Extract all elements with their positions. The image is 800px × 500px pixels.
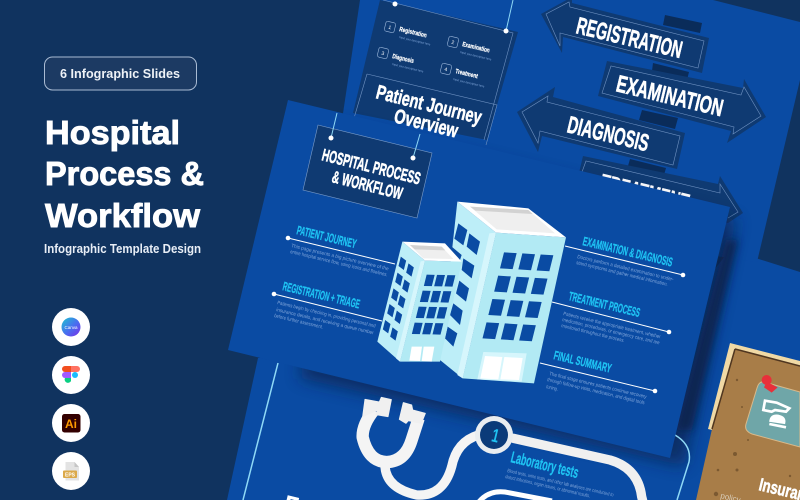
panel: main slide (228, 100, 730, 458)
shadow under main slide (300, 125, 736, 466)
teal note card (746, 375, 800, 447)
illustration: hospital buildings (377, 202, 566, 383)
callout: patient journey: entire hospital service flow, using icons and flowlines. (290, 249, 388, 278)
slide outline (243, 363, 689, 500)
badge: 6 infographic slides: 6 Infographic Slides (60, 66, 180, 81)
callout: final summary: through follow-up visits, medication, and digital tools (547, 377, 646, 406)
callout: examination and diagnosis: EXAMINATION & DIAGNOSIS (581, 234, 674, 269)
icon: figma (52, 356, 90, 394)
icon: adobe illustrator (52, 404, 90, 442)
arrow: treatment: TREATMENT (598, 170, 692, 217)
icon: canva (52, 308, 90, 346)
step 1: Input your description here (399, 35, 431, 47)
step 2: Examination (462, 41, 490, 54)
arrow: examination (598, 61, 766, 143)
arrow: registration: REGISTRATION (574, 13, 685, 64)
arrow: registration (541, 0, 709, 73)
step 2: Input your description here (460, 50, 492, 62)
callout: registration and triage: before further assessment. (274, 313, 324, 331)
callout: examination and diagnosis: Doctors perform a detailed examination to under- (577, 254, 674, 283)
title: Process & (45, 155, 204, 192)
icon: eps file (52, 452, 90, 490)
subtitle: Infographic Template Design (44, 242, 201, 256)
callout: treatment process: Patients receive the appropriate treatment, whether (563, 311, 661, 340)
arrow: diagnosis: DIAGNOSIS (565, 112, 652, 157)
callout: treatment process: monitored throughout the process. (561, 323, 625, 344)
callout: patient journey: This page presents a big picture overview of the (291, 243, 389, 272)
step 2: 2 (451, 40, 455, 46)
arrow: treatment (575, 156, 743, 223)
callout: patient journey (286, 223, 395, 278)
callout: registration and triage: insurance details, and receiving a queue number (276, 307, 374, 336)
badge: 6 infographic slides (44, 57, 196, 90)
title: Hospital (45, 114, 180, 151)
shadow right of main slide (676, 240, 738, 430)
callout: final summary: tuning. (546, 384, 559, 393)
next step outline (478, 492, 552, 500)
arrow: diagnosis (517, 87, 685, 169)
callout: final summary (540, 348, 657, 406)
step 2 (447, 36, 492, 62)
step 4: Treatment (455, 68, 479, 80)
callout: patient journey: PATIENT JOURNEY (295, 223, 358, 251)
icon: canva: Canva (64, 325, 78, 330)
arrow: examination: EXAMINATION (614, 71, 726, 122)
heading: hospital process and workflow: & WORKFLOW (330, 167, 405, 203)
step 1 (384, 21, 431, 47)
heading: hospital process and workflow: HOSPITAL PROCESS (320, 145, 423, 188)
step 4: 4 (444, 67, 448, 73)
step number circle (475, 416, 513, 454)
icon: eps file: EPS (65, 472, 76, 478)
callout: registration and triage (272, 279, 382, 336)
callout: examination and diagnosis: stand symptoms and gather medical information. (576, 260, 668, 288)
callout: final summary: The final stage ensures patients continue recovery (549, 371, 648, 400)
panel: patient journey card (352, 0, 518, 145)
callout: final summary: FINAL SUMMARY (552, 348, 613, 376)
callout: registration and triage: REGISTRATION + TRIAGE (281, 279, 361, 311)
step 3: Diagnosis (392, 53, 415, 65)
panel: upper slide (330, 0, 800, 262)
tall building (440, 202, 566, 383)
callout: registration and triage: Patients begin by checking in, providing personal and (277, 300, 376, 330)
step 4 (440, 63, 485, 89)
step 3: Input your description here (392, 62, 424, 74)
callout: treatment process (552, 289, 671, 346)
callout: treatment process: TREATMENT PROCESS (567, 289, 642, 320)
callout: treatment process: medication, procedures, or emergency care, and are (562, 317, 660, 346)
panel: cork board slide (696, 343, 800, 500)
step number circle: 1 (489, 426, 501, 448)
panel: lower slides (227, 250, 800, 500)
small building (377, 242, 462, 362)
card title: Patient Journey (374, 82, 485, 129)
callout: examination and diagnosis (565, 234, 685, 288)
illustration: stethoscope (363, 397, 643, 500)
icon: red pin (762, 375, 778, 393)
step 1: 1 (388, 25, 392, 31)
step 1: Registration (399, 26, 427, 39)
title (45, 114, 204, 234)
heading: hospital process and workflow (303, 113, 432, 218)
step 3: 3 (381, 51, 385, 57)
step 4: Input your description here (453, 77, 485, 89)
card title: Overview (392, 106, 460, 143)
text: laboratory tests: Laboratory tests (509, 449, 580, 482)
icon: hand and bell (763, 401, 789, 427)
icon: adobe illustrator: Ai (65, 417, 77, 431)
signpost posts (628, 15, 702, 175)
step 3 (377, 47, 424, 74)
title: Workflow (45, 197, 200, 234)
